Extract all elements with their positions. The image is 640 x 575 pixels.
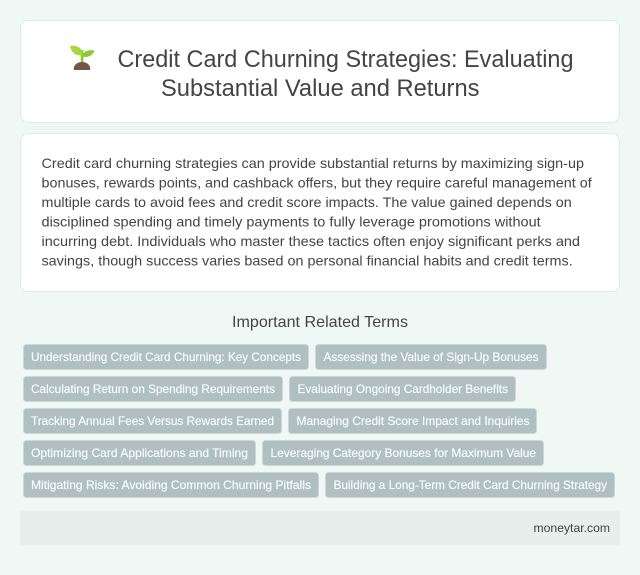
summary paragraph: savings, though success varies based on personal financial habits and credit terms. bbox=[42, 252, 573, 268]
chip: category bonuses: Leveraging Category Bonuses for Maximum Value bbox=[270, 446, 536, 460]
summary paragraph: disciplined spending and timely payments to fully leverage promotions without bbox=[42, 214, 541, 230]
footer bbox=[20, 511, 620, 545]
chip: mitigating risks bbox=[24, 472, 318, 498]
chip: understanding churning bbox=[24, 344, 308, 370]
chip: sign-up bonuses bbox=[316, 344, 546, 370]
chip: cardholder benefits bbox=[290, 376, 516, 402]
chip: long-term strategy: Building a Long-Term Credit Card Churning Strategy bbox=[334, 478, 607, 492]
chip: annual fees bbox=[24, 408, 282, 434]
chip: return on spending bbox=[24, 376, 282, 402]
footer brand: moneytar.com bbox=[534, 521, 610, 535]
chip: understanding churning: Understanding Credit Card Churning: Key Concepts bbox=[31, 350, 301, 364]
title bbox=[118, 46, 574, 102]
chip: credit score: Managing Credit Score Impact and Inquiries bbox=[296, 414, 530, 428]
panel: title card bbox=[20, 20, 620, 122]
summary paragraph bbox=[42, 155, 592, 268]
chip: annual fees: Tracking Annual Fees Versus Rewards Earned bbox=[31, 414, 274, 428]
chip: mitigating risks: Mitigating Risks: Avoiding Common Churning Pitfalls bbox=[31, 478, 311, 492]
summary paragraph: bonuses, rewards points, and cashback offers, but they require careful management of bbox=[42, 174, 592, 190]
icon: sprout bbox=[70, 46, 94, 70]
title: Credit Card Churning Strategies: Evaluating bbox=[118, 46, 574, 73]
title: Substantial Value and Returns bbox=[161, 75, 480, 102]
chip: credit score bbox=[288, 408, 536, 434]
summary paragraph: incurring debt. Individuals who master these tactics often enjoy significant perks and bbox=[42, 233, 580, 249]
summary paragraph: Credit card churning strategies can provide substantial returns by maximizing sign-up bbox=[42, 155, 584, 171]
heading: related terms: Important Related Terms bbox=[232, 314, 408, 331]
chip: applications timing: Optimizing Card Applications and Timing bbox=[31, 446, 248, 460]
panel: summary text bbox=[20, 134, 620, 292]
chip: category bonuses bbox=[262, 440, 544, 466]
chip: long-term strategy bbox=[326, 472, 614, 498]
chip: sign-up bonuses: Assessing the Value of Sign-Up Bonuses bbox=[324, 350, 538, 364]
chip: return on spending: Calculating Return on Spending Requirements bbox=[31, 382, 275, 396]
related terms chips bbox=[24, 344, 614, 498]
summary paragraph: multiple cards to avoid fees and credit score impacts. The value gained depends on bbox=[42, 194, 572, 210]
chip: cardholder benefits: Evaluating Ongoing Cardholder Benefits bbox=[298, 382, 508, 396]
chip: applications timing bbox=[24, 440, 256, 466]
